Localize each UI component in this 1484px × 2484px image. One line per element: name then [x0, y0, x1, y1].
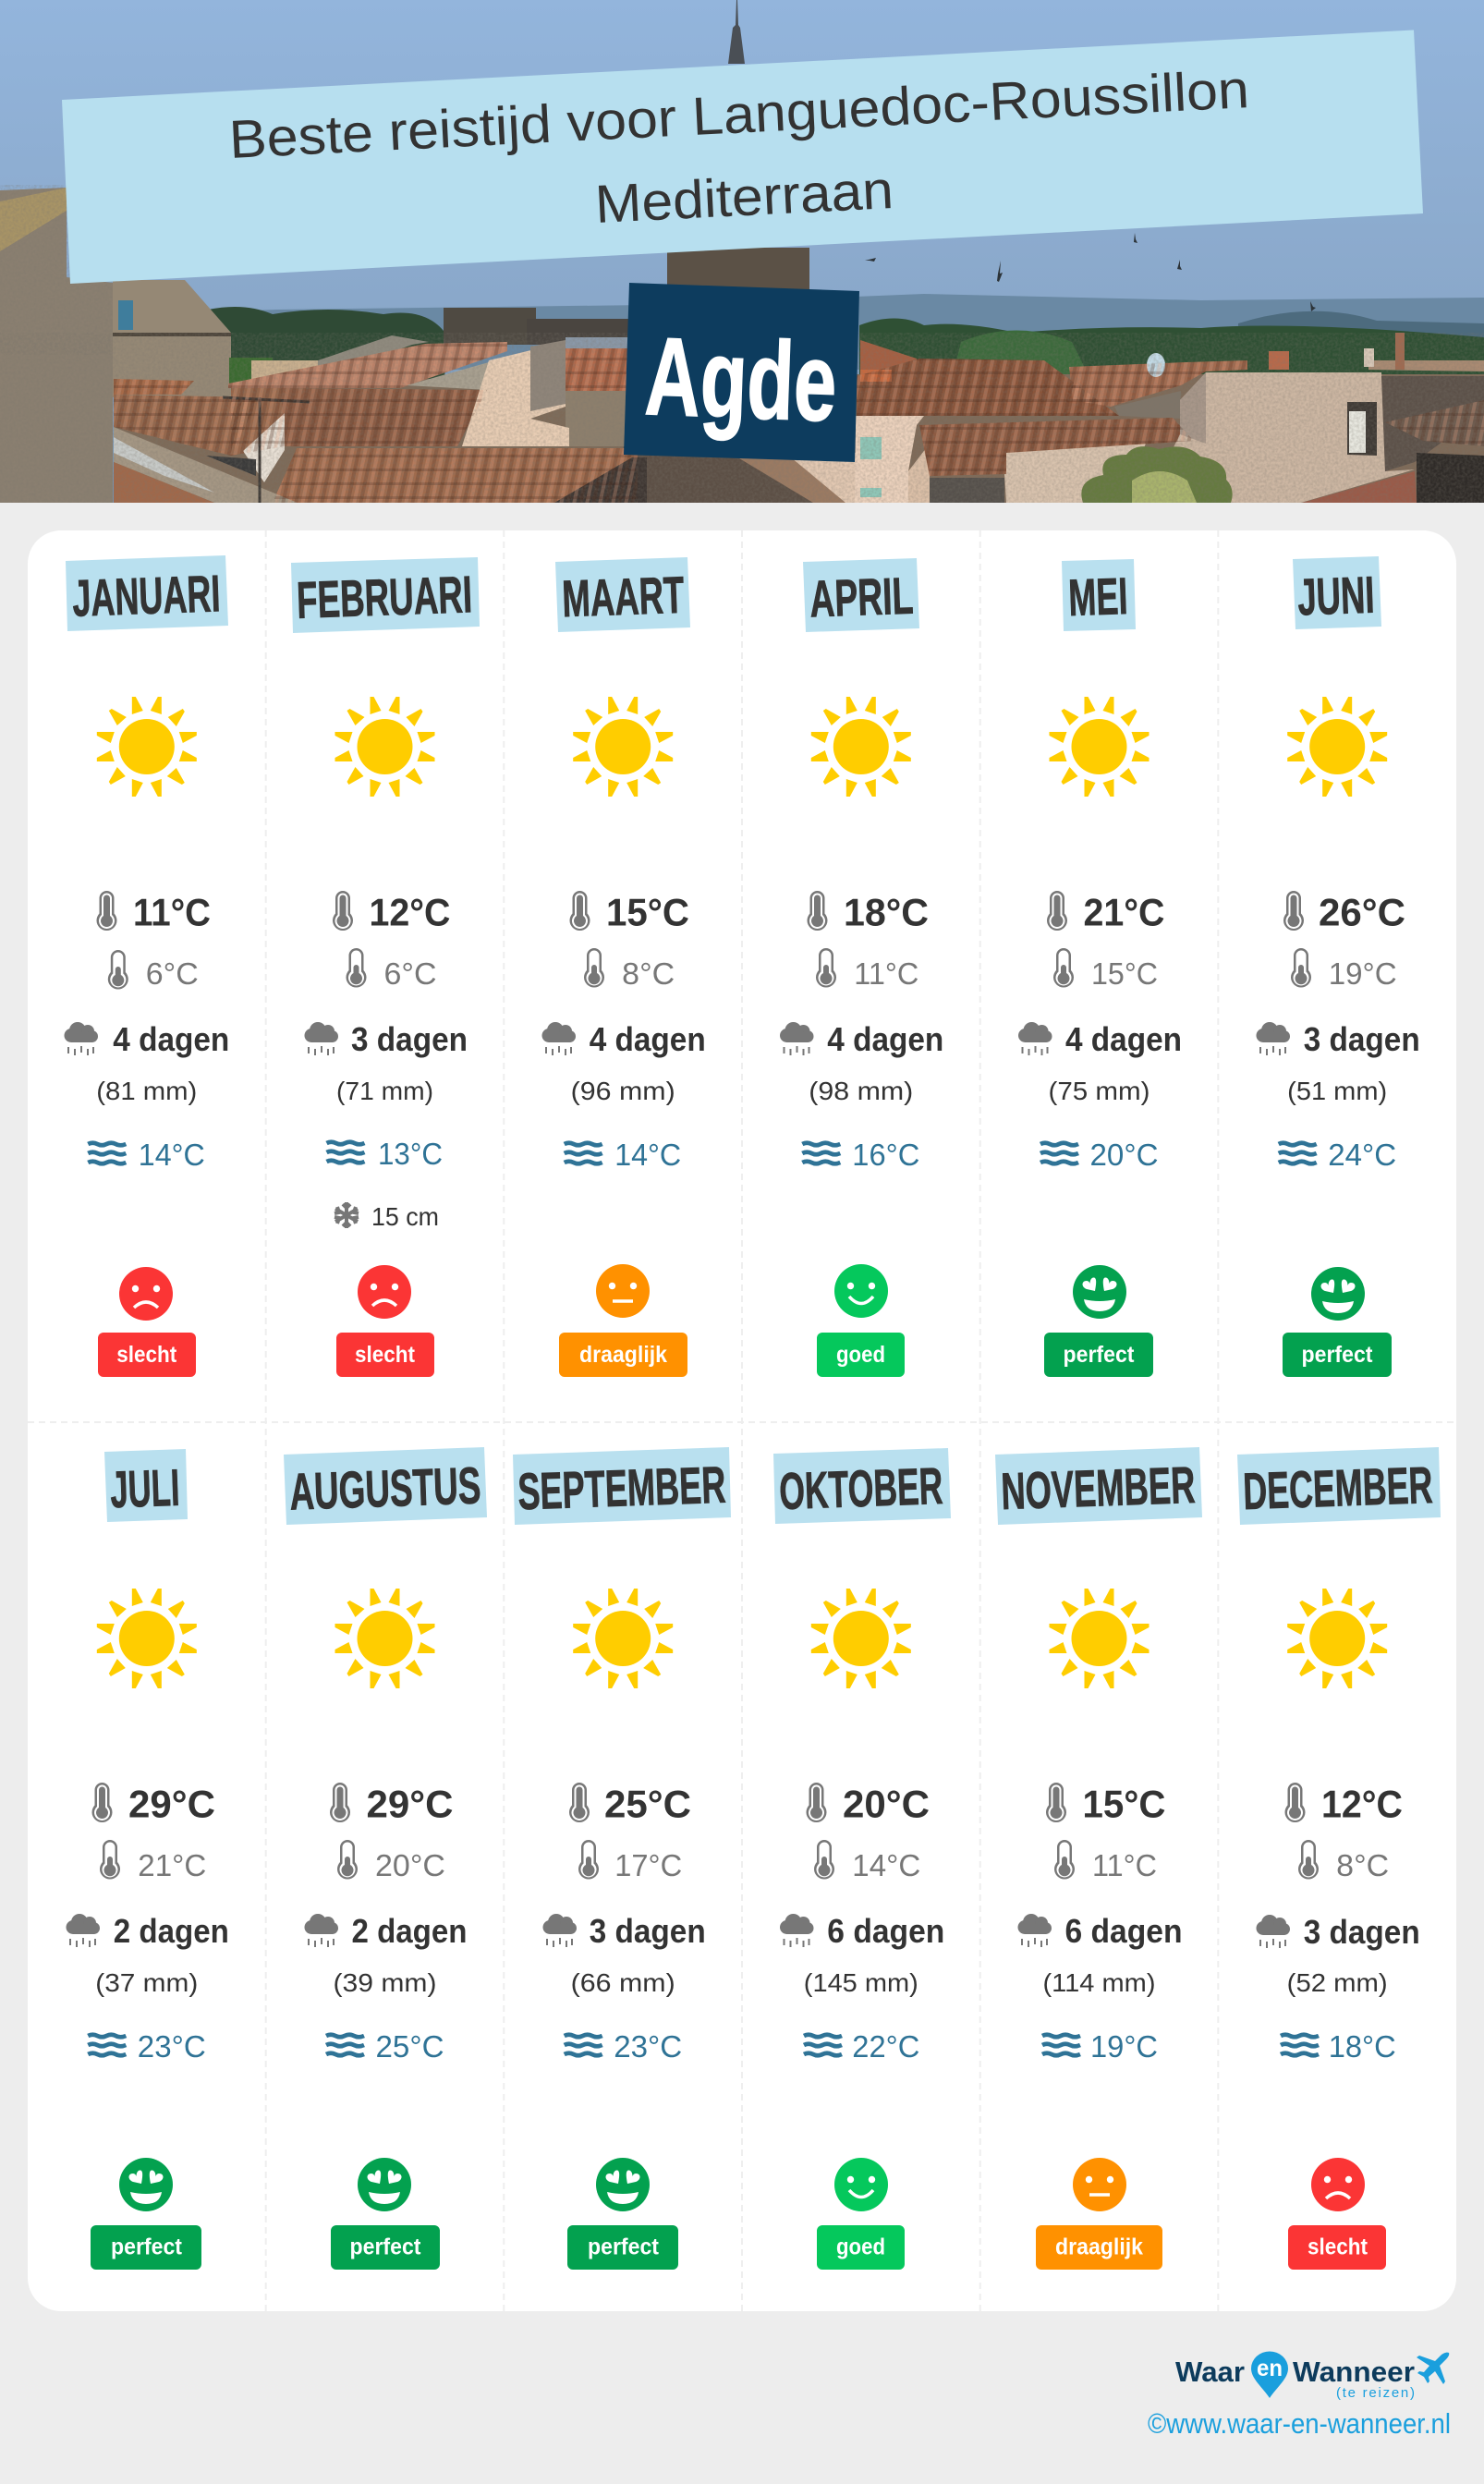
rating label: perfect [111, 2234, 183, 2260]
month title [555, 557, 690, 632]
rating face [358, 1265, 411, 1319]
icon: min temperature [346, 948, 366, 988]
copyright url: ©www.waar-en-wanneer.nl [1148, 2407, 1451, 2440]
icon: sea water [327, 1142, 364, 1163]
panel: mei [1018, 559, 1182, 1377]
icon: rain [305, 1914, 338, 1947]
icon: sea water [565, 2035, 602, 2055]
month title [803, 558, 919, 632]
month title: SEPTEMBER [517, 1455, 726, 1520]
icon: max temperature [330, 1783, 350, 1822]
precipitation: (75 mm) [1048, 1077, 1149, 1105]
precipitation: (145 mm) [804, 1968, 918, 1997]
logo: Waar en Wanneer: Waar [1175, 2356, 1245, 2388]
icon: max temperature [1283, 891, 1304, 931]
logo: Waar en Wanneer [1175, 2351, 1449, 2401]
month title: JULI [109, 1458, 180, 1518]
rain days: 3 dagen [1304, 1913, 1420, 1951]
icon: min temperature [578, 1840, 599, 1880]
rain days: 3 dagen [351, 1020, 468, 1058]
min temperature: 19°C [1329, 957, 1397, 992]
header photo: rooftops of Agde [0, 0, 1484, 503]
icon: sun [1287, 1589, 1387, 1688]
rain days: 4 dagen [113, 1020, 229, 1058]
min temperature: 8°C [1336, 1849, 1389, 1883]
rating label: slecht [1308, 2234, 1368, 2260]
logo: Waar en Wanneer: (te reizen) [1336, 2385, 1415, 2401]
snow depth: 15 cm [371, 1202, 439, 1231]
icon: sun [335, 1589, 434, 1688]
icon: sun [573, 1589, 673, 1688]
precipitation: (66 mm) [571, 1968, 675, 1997]
month title: APRIL [809, 566, 914, 627]
min temperature: 17°C [614, 1849, 682, 1883]
icon: sea water [565, 1143, 602, 1163]
sea temperature: 19°C [1090, 2030, 1158, 2064]
icon: sun [335, 697, 434, 797]
rating label: perfect [1063, 1342, 1135, 1368]
month title [104, 1449, 188, 1522]
icon: sun [811, 1589, 911, 1688]
icon: min temperature [814, 1840, 834, 1880]
icon: min temperature [1054, 1840, 1075, 1880]
precipitation: (114 mm) [1042, 1968, 1155, 1997]
rain days: 4 dagen [1065, 1020, 1182, 1058]
icon: sun [811, 697, 911, 797]
month title [1062, 559, 1136, 631]
icon: sun [97, 697, 197, 797]
rating label: goed [836, 1342, 885, 1368]
icon: min temperature [1298, 1840, 1319, 1880]
rain days: 2 dagen [114, 1912, 229, 1950]
rain days: 4 dagen [590, 1020, 706, 1058]
icon: max temperature [96, 891, 116, 931]
rating face [596, 2158, 650, 2211]
min temperature: 14°C [852, 1849, 920, 1883]
sea temperature: 22°C [852, 2030, 919, 2064]
min temperature: 21°C [138, 1849, 206, 1883]
precipitation: (96 mm) [571, 1077, 675, 1105]
icon: sea water [1281, 2035, 1319, 2055]
icon: sea water [88, 2035, 126, 2055]
rating label [817, 2225, 905, 2270]
month title [66, 555, 228, 631]
rating face [119, 1267, 173, 1321]
icon: max temperature [569, 891, 590, 931]
rating label: perfect [1301, 1342, 1373, 1368]
max temperature: 21°C [1083, 891, 1164, 933]
month title [291, 557, 480, 633]
rain days: 3 dagen [590, 1912, 706, 1950]
sea temperature: 18°C [1329, 2030, 1396, 2064]
max temperature: 15°C [606, 891, 689, 933]
min temperature: 6°C [146, 957, 199, 992]
max temperature: 12°C [370, 891, 451, 933]
icon: rain [1257, 1022, 1290, 1055]
rating label: slecht [355, 1342, 416, 1368]
max temperature: 29°C [128, 1782, 215, 1826]
title banner: Beste reistijd voor Languedoc-Roussillon [227, 59, 1250, 170]
precipitation: (81 mm) [96, 1077, 197, 1105]
sea temperature: 24°C [1328, 1138, 1396, 1173]
month title: MAART [561, 566, 685, 627]
panel: maart [541, 557, 706, 1377]
rating face [834, 2158, 888, 2211]
rating label [817, 1333, 905, 1377]
icon: sun [97, 1589, 197, 1688]
precipitation: (37 mm) [95, 1968, 198, 1997]
rating label [567, 2225, 678, 2270]
sea temperature: 13°C [378, 1138, 443, 1172]
icon: rain [65, 1022, 98, 1055]
month title [284, 1447, 487, 1525]
rain days: 3 dagen [1304, 1020, 1420, 1058]
sea temperature: 14°C [614, 1138, 681, 1173]
month title: AUGUSTUS [288, 1455, 481, 1521]
icon: rain [1257, 1915, 1290, 1948]
rating face [358, 2158, 411, 2211]
icon: min temperature [584, 948, 604, 988]
month title: OKTOBER [778, 1456, 943, 1520]
rating label: perfect [349, 2234, 421, 2260]
rating face [1073, 1265, 1126, 1319]
icon: sun [573, 697, 673, 797]
rating face [834, 1264, 888, 1318]
precipitation: (51 mm) [1287, 1077, 1387, 1105]
panel: september [513, 1447, 731, 2270]
rating label [1044, 1333, 1153, 1377]
month title [773, 1448, 951, 1524]
min temperature: 15°C [1091, 957, 1158, 992]
sea temperature: 25°C [375, 2030, 444, 2064]
icon: max temperature [569, 1783, 590, 1822]
icon: sea water [1040, 1143, 1078, 1163]
icon: sea water [1042, 2035, 1080, 2055]
title banner: Mediterraan [593, 160, 894, 235]
max temperature: 15°C [1083, 1782, 1166, 1826]
min temperature: 11°C [1092, 1849, 1157, 1883]
city label: Agde: Agde [643, 314, 839, 444]
rating face [596, 1264, 650, 1318]
icon: rain [67, 1914, 100, 1947]
icon: sea water [88, 1143, 126, 1163]
month title: FEBRUARI [296, 565, 473, 629]
icon: max temperature [92, 1783, 113, 1822]
icon: sea water [804, 2035, 842, 2055]
white card panel [28, 530, 1456, 2311]
rating label [1288, 2225, 1386, 2270]
icon: min temperature [337, 1840, 358, 1880]
panel: juli [67, 1449, 229, 2270]
precipitation: (39 mm) [333, 1968, 436, 1997]
rating label [98, 1333, 196, 1377]
panel: februari [291, 557, 480, 1377]
month title: JUNI [1296, 566, 1375, 626]
rain days: 2 dagen [351, 1912, 468, 1950]
sea temperature: 23°C [138, 2030, 206, 2064]
month title [513, 1447, 731, 1525]
panel: december [1237, 1447, 1441, 2270]
min temperature: 8°C [622, 957, 675, 992]
max temperature: 25°C [604, 1782, 691, 1826]
panel: augustus [284, 1447, 487, 2270]
max temperature: 29°C [366, 1782, 453, 1826]
panel: oktober [773, 1448, 951, 2270]
rating label: draaglijk [579, 1342, 667, 1368]
max temperature: 11°C [133, 891, 211, 933]
month title: MEI [1067, 566, 1128, 627]
sea temperature: 23°C [614, 2030, 682, 2064]
icon: rain [543, 1914, 577, 1947]
precipitation: (71 mm) [336, 1077, 433, 1105]
icon: sea water [802, 1143, 840, 1163]
icon: min temperature [108, 950, 128, 990]
rain days: 6 dagen [827, 1912, 944, 1950]
icon: max temperature [1047, 891, 1067, 931]
icon: rain [780, 1914, 813, 1947]
title banner [62, 30, 1423, 284]
month title [1293, 556, 1381, 629]
rating label: slecht [116, 1342, 177, 1368]
rating label [1283, 1333, 1392, 1377]
icon: snow [335, 1202, 359, 1228]
min temperature: 11°C [854, 957, 918, 992]
rating label [91, 2225, 201, 2270]
rain days: 6 dagen [1064, 1912, 1183, 1950]
max temperature: 18°C [844, 891, 929, 933]
max temperature: 12°C [1321, 1782, 1403, 1826]
rating label: draaglijk [1055, 2234, 1143, 2260]
icon: rain [780, 1022, 813, 1055]
rating face [1311, 1267, 1365, 1321]
rating label [559, 1333, 687, 1377]
panel: januari [65, 555, 229, 1377]
icon: min temperature [816, 948, 836, 988]
rating face [1073, 2158, 1126, 2211]
icon: rain [305, 1022, 338, 1055]
icon: max temperature [333, 891, 353, 931]
rating label: perfect [588, 2234, 660, 2260]
rating label: goed [836, 2234, 885, 2260]
icon: max temperature [806, 1783, 826, 1822]
panel: november [995, 1447, 1202, 2270]
icon: sea water [326, 2035, 364, 2055]
panel: april [780, 558, 943, 1377]
rating label [336, 1333, 434, 1377]
logo: Waar en Wanneer: en [1257, 2356, 1283, 2381]
icon: min temperature [1053, 948, 1074, 988]
icon: max temperature [808, 891, 828, 931]
icon: sun [1050, 697, 1149, 797]
rating face [119, 2158, 173, 2211]
min temperature: 20°C [375, 1849, 445, 1883]
sea temperature: 14°C [139, 1138, 205, 1173]
icon: min temperature [1291, 948, 1311, 988]
icon: rain [1018, 1914, 1052, 1947]
min temperature: 6°C [384, 957, 436, 992]
logo: Waar en Wanneer: Wanneer [1293, 2356, 1415, 2388]
icon: sun [1287, 697, 1387, 797]
icon: sun [1050, 1589, 1149, 1688]
sea temperature: 20°C [1090, 1138, 1159, 1173]
icon: min temperature [100, 1840, 120, 1880]
max temperature: 26°C [1319, 891, 1405, 933]
rating label [331, 2225, 440, 2270]
precipitation: (98 mm) [809, 1077, 913, 1105]
month title: JANUARI [71, 564, 221, 627]
month title [995, 1447, 1202, 1525]
rating label [1036, 2225, 1162, 2270]
icon: rain [1018, 1022, 1052, 1055]
icon: max temperature [1046, 1783, 1066, 1822]
precipitation: (52 mm) [1287, 1968, 1388, 1997]
rating face [1311, 2158, 1365, 2211]
sea temperature: 16°C [852, 1138, 919, 1173]
max temperature: 20°C [843, 1782, 930, 1826]
rain days: 4 dagen [827, 1020, 943, 1058]
icon: max temperature [1284, 1783, 1305, 1822]
month title: NOVEMBER [1000, 1455, 1196, 1520]
panel: juni [1257, 556, 1420, 1377]
city label: Agde [624, 283, 859, 462]
icon: sea water [1279, 1143, 1317, 1163]
icon: rain [541, 1022, 576, 1055]
